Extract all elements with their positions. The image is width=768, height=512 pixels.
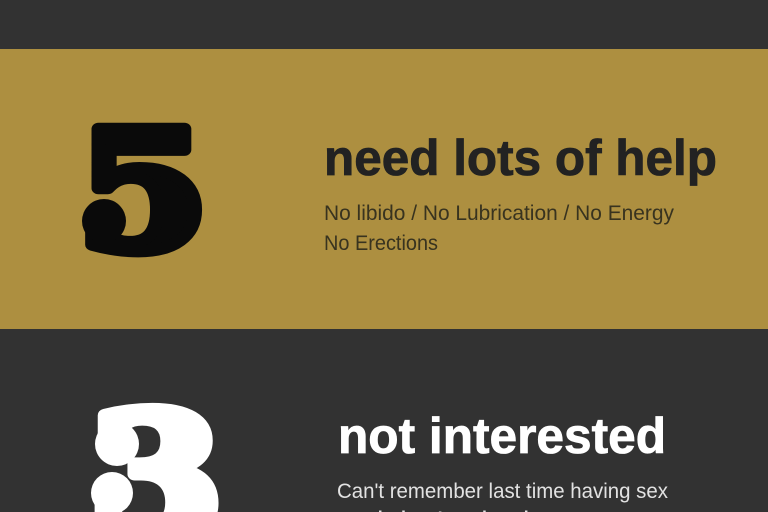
number 5: 5 xyxy=(76,95,210,289)
panel: not interested xyxy=(88,377,668,512)
panel: need lots of help xyxy=(0,49,768,329)
heading: need lots of help: need lots of help xyxy=(324,130,717,186)
text: symptoms line 1: No libido / No Lubrication / No Energy xyxy=(324,202,674,225)
text: symptoms line 2: No Erections xyxy=(324,232,438,255)
text: description line 1: Can't remember last time having sex xyxy=(337,480,668,503)
heading: not interested: not interested xyxy=(338,408,666,464)
